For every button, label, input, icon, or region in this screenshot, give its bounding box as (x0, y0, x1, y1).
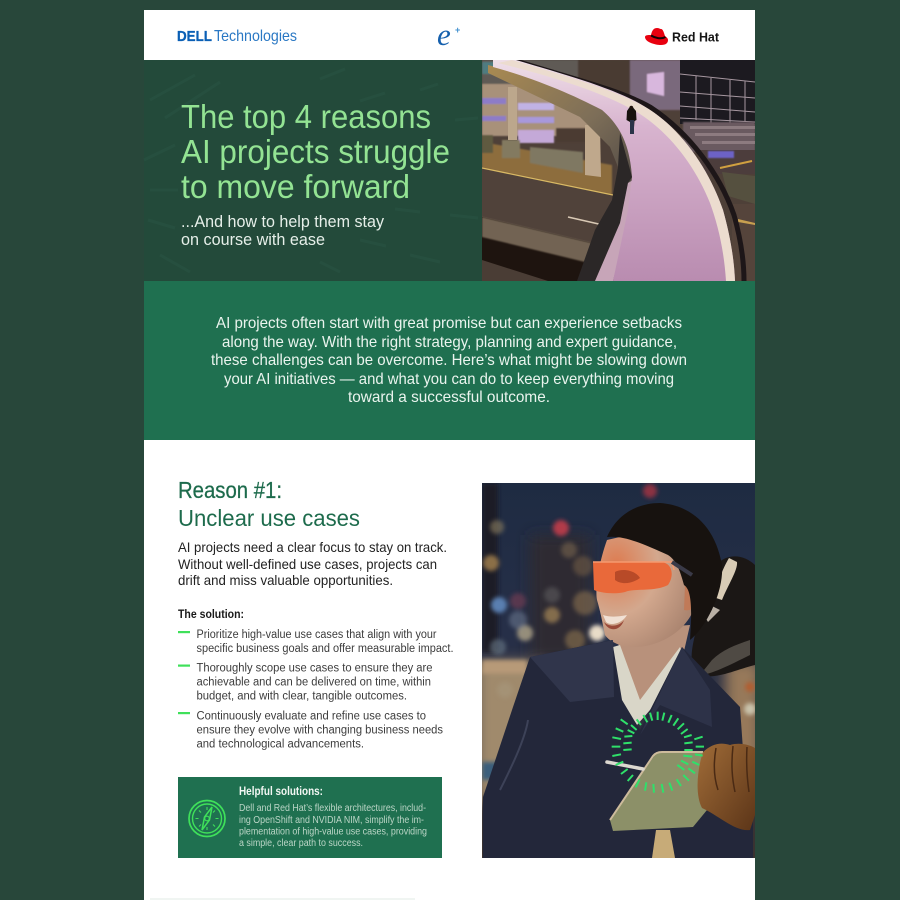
lower hedge (482, 217, 592, 281)
person walking (626, 106, 636, 134)
logo: e plus (437, 17, 460, 52)
outer rail (516, 61, 744, 281)
icon: compass (189, 800, 225, 836)
reason description: Without well-defined use cases, projects can (178, 556, 437, 572)
walkway side wall (488, 65, 632, 182)
bullet 2: budget, and with clear, tangible outcomes. (196, 690, 407, 702)
callout text: plementation of high-value use cases, providing (239, 826, 427, 838)
road (583, 190, 610, 196)
hero photo: walkway at night (482, 60, 755, 281)
green radial ticks (612, 712, 704, 793)
reason heading (178, 477, 360, 531)
intro text: these challenges can be overcome. Here’s what might be slowing down (211, 352, 687, 369)
bullet 2: Thoroughly scope use cases to ensure they are (196, 662, 432, 674)
logo: Dell Technologies (177, 28, 297, 45)
logo: e plus: e (437, 17, 451, 52)
bokeh lights (483, 484, 756, 715)
intro text (211, 315, 687, 406)
intro text: your AI initiatives — and what you can do to keep everything moving (224, 371, 674, 388)
header logos (177, 17, 720, 52)
photo: woman with glasses and tablet (476, 483, 761, 858)
subtitle (181, 212, 384, 249)
pale edge strip (595, 180, 633, 281)
shirt collar (613, 645, 684, 725)
jacket (483, 640, 753, 858)
helpful solutions callout (178, 777, 442, 858)
cream deck edge (498, 60, 735, 281)
reason description: drift and miss valuable opportunities. (178, 572, 393, 588)
right side city (680, 60, 755, 124)
callout text: a simple, clear path to success. (239, 838, 363, 849)
tablet (607, 752, 707, 858)
reason description (178, 539, 447, 588)
subtitle: ...And how to help them stay (181, 212, 384, 231)
callout text (239, 803, 427, 849)
dark curb (577, 133, 632, 281)
logo: Red Hat (645, 28, 720, 45)
bullet 1: specific business goals and offer measurable impact. (196, 643, 454, 655)
ponytail (692, 556, 755, 676)
title (181, 98, 450, 205)
bullet 3: Continuously evaluate and refine use cases to (196, 710, 426, 722)
backdrop buildings (482, 60, 682, 195)
face (596, 537, 692, 644)
logo: Dell Technologies: Technologies (214, 28, 297, 45)
intro text: AI projects often start with great promise but can experience setbacks (216, 315, 682, 332)
faint footer rule (150, 898, 415, 900)
title: AI projects struggle (181, 133, 450, 170)
intro band (144, 281, 755, 440)
intro text: toward a successful outcome. (348, 389, 550, 406)
callout heading: Helpful solutions: (239, 786, 323, 798)
bullet 2: achievable and can be delivered on time, within (196, 676, 431, 688)
hair (607, 503, 722, 640)
logo: e plus: + (455, 25, 460, 35)
mouth (603, 615, 627, 624)
bullet 1: Prioritize high-value use cases that align with your (196, 629, 437, 641)
logo: Dell Technologies: DELL (177, 29, 212, 45)
subtitle: on course with ease (181, 230, 325, 249)
title: The top 4 reasons (181, 98, 431, 135)
walkway deck (493, 60, 735, 281)
ear (684, 586, 691, 610)
bullet 3: and technological advancements. (196, 738, 364, 750)
bullet 1 (178, 629, 454, 655)
callout text: Dell and Red Hat’s flexible architectures, includ- (239, 803, 426, 814)
neck (617, 625, 690, 705)
reason description: AI projects need a clear focus to stay on track. (178, 539, 447, 555)
hand (698, 744, 755, 830)
bullet 3 (178, 710, 443, 750)
callout text: ing OpenShift and NVIDIA NIM, simplify the im- (239, 815, 424, 826)
bullet 3: ensure they evolve with changing business needs (196, 724, 443, 736)
logo: Red Hat: Red Hat (672, 30, 720, 44)
infographic page (144, 10, 755, 900)
solution list (178, 629, 454, 750)
intro text: along the way. With the right strategy, planning and expert guidance, (222, 334, 677, 351)
bullet 2 (178, 662, 432, 702)
title: to move forward (181, 168, 410, 205)
solution label: The solution: (178, 609, 244, 621)
reason heading: Unclear use cases (178, 505, 360, 531)
hero panel (144, 60, 482, 281)
reason 1 section (150, 477, 761, 900)
glasses (593, 562, 692, 593)
reason heading: Reason #1: (178, 477, 282, 503)
